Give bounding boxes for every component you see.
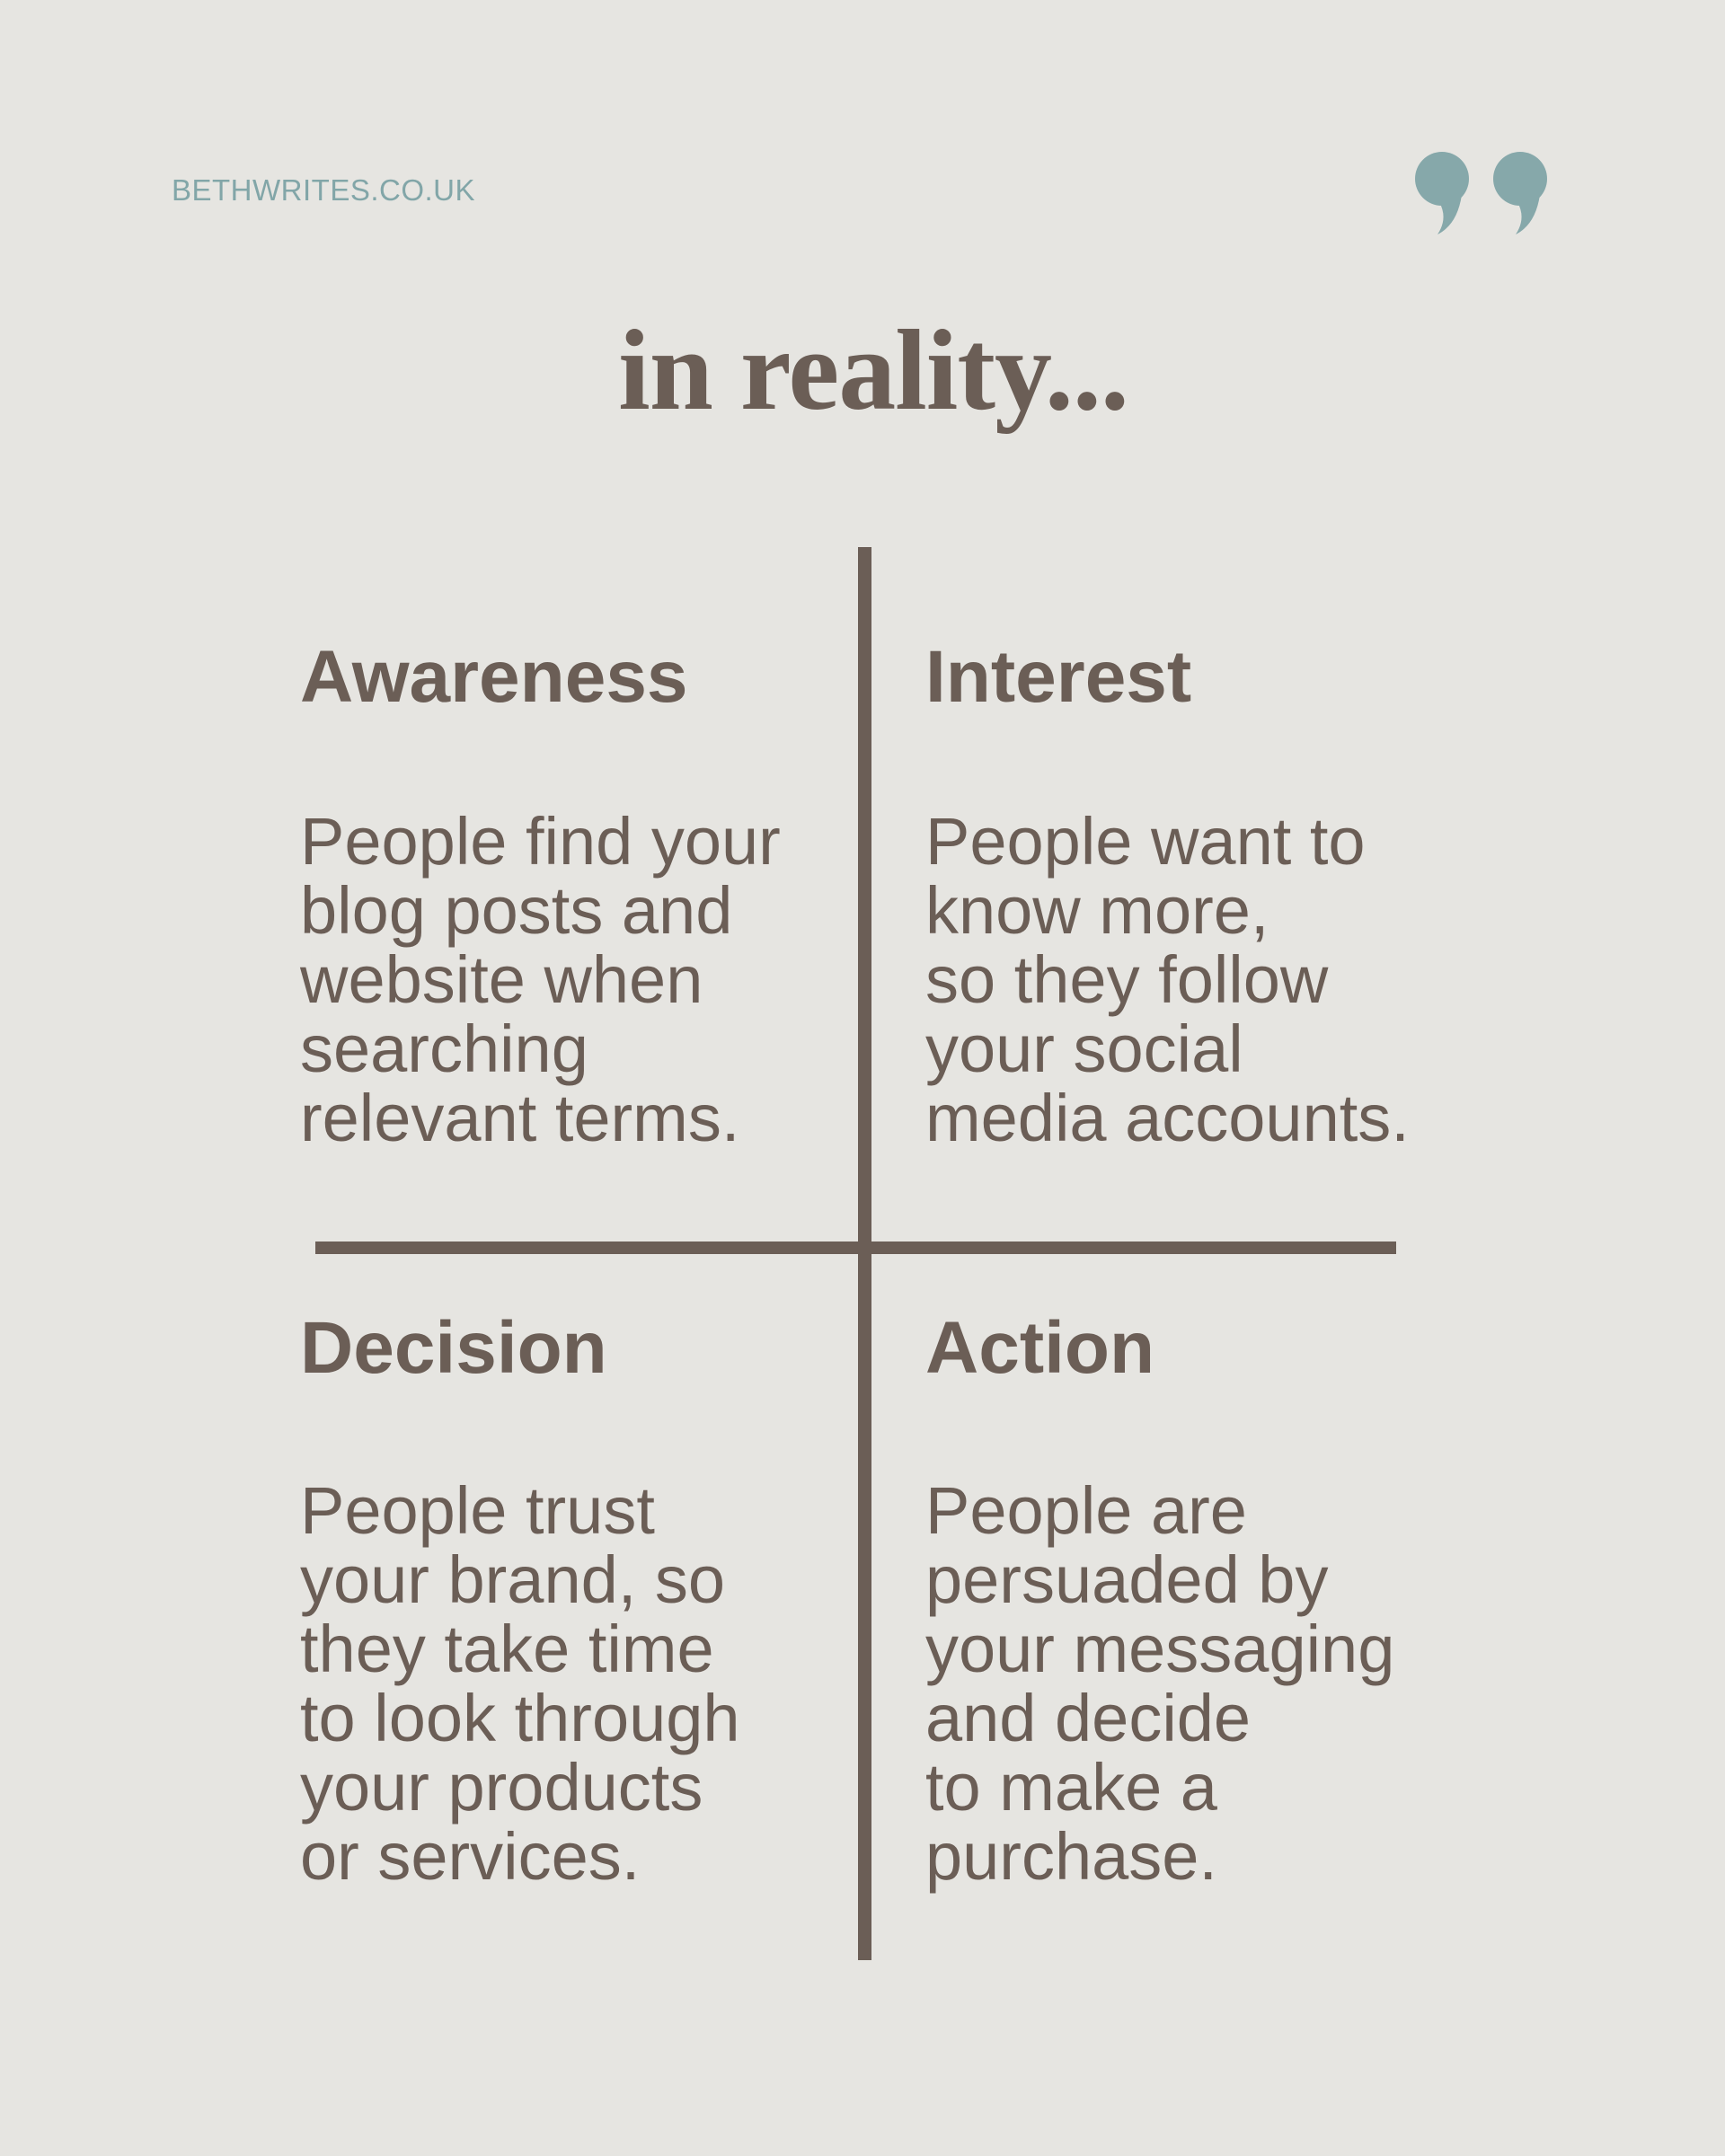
- heading: action: Action: [925, 1307, 1154, 1389]
- text: awareness: blog posts and: [300, 873, 732, 948]
- text: awareness: [300, 804, 781, 1155]
- text: action: [925, 1473, 1394, 1894]
- text: action: and decide: [925, 1681, 1251, 1755]
- text: interest: People want to: [925, 804, 1366, 879]
- panel: decision: [300, 1307, 740, 1894]
- text: interest: your social: [925, 1012, 1243, 1086]
- horizontal divider: [315, 1241, 1396, 1254]
- panel: interest: [925, 636, 1410, 1155]
- panel: action: [925, 1307, 1394, 1894]
- text: decision: they take time: [300, 1612, 714, 1686]
- logo text: BETHWRITES.CO.UK: [172, 173, 475, 207]
- text: action: your messaging: [925, 1612, 1394, 1686]
- heading: interest: Interest: [925, 636, 1191, 718]
- text: awareness: relevant terms.: [300, 1081, 739, 1155]
- text: decision: [300, 1473, 740, 1894]
- text: awareness: website when: [300, 942, 703, 1017]
- text: decision: your brand, so: [300, 1542, 725, 1617]
- panel: awareness: [300, 636, 781, 1155]
- heading: awareness: Awareness: [300, 636, 688, 718]
- text: interest: so they follow: [925, 942, 1328, 1017]
- text: decision: your products: [300, 1750, 703, 1825]
- text: action: to make a: [925, 1750, 1217, 1825]
- text: decision: People trust: [300, 1473, 655, 1548]
- text: action: People are: [925, 1473, 1247, 1548]
- icon: quote marks: [1415, 152, 1547, 234]
- title: in reality...: [618, 306, 1128, 434]
- text: awareness: searching: [300, 1012, 588, 1086]
- vertical divider: [858, 547, 871, 1960]
- text: decision: or services.: [300, 1819, 640, 1894]
- heading: decision: Decision: [300, 1307, 607, 1389]
- text: action: persuaded by: [925, 1542, 1328, 1617]
- text: interest: [925, 804, 1410, 1155]
- text: action: purchase.: [925, 1819, 1217, 1894]
- text: interest: know more,: [925, 873, 1269, 948]
- text: decision: to look through: [300, 1681, 740, 1755]
- text: awareness: People find your: [300, 804, 781, 879]
- text: interest: media accounts.: [925, 1081, 1410, 1155]
